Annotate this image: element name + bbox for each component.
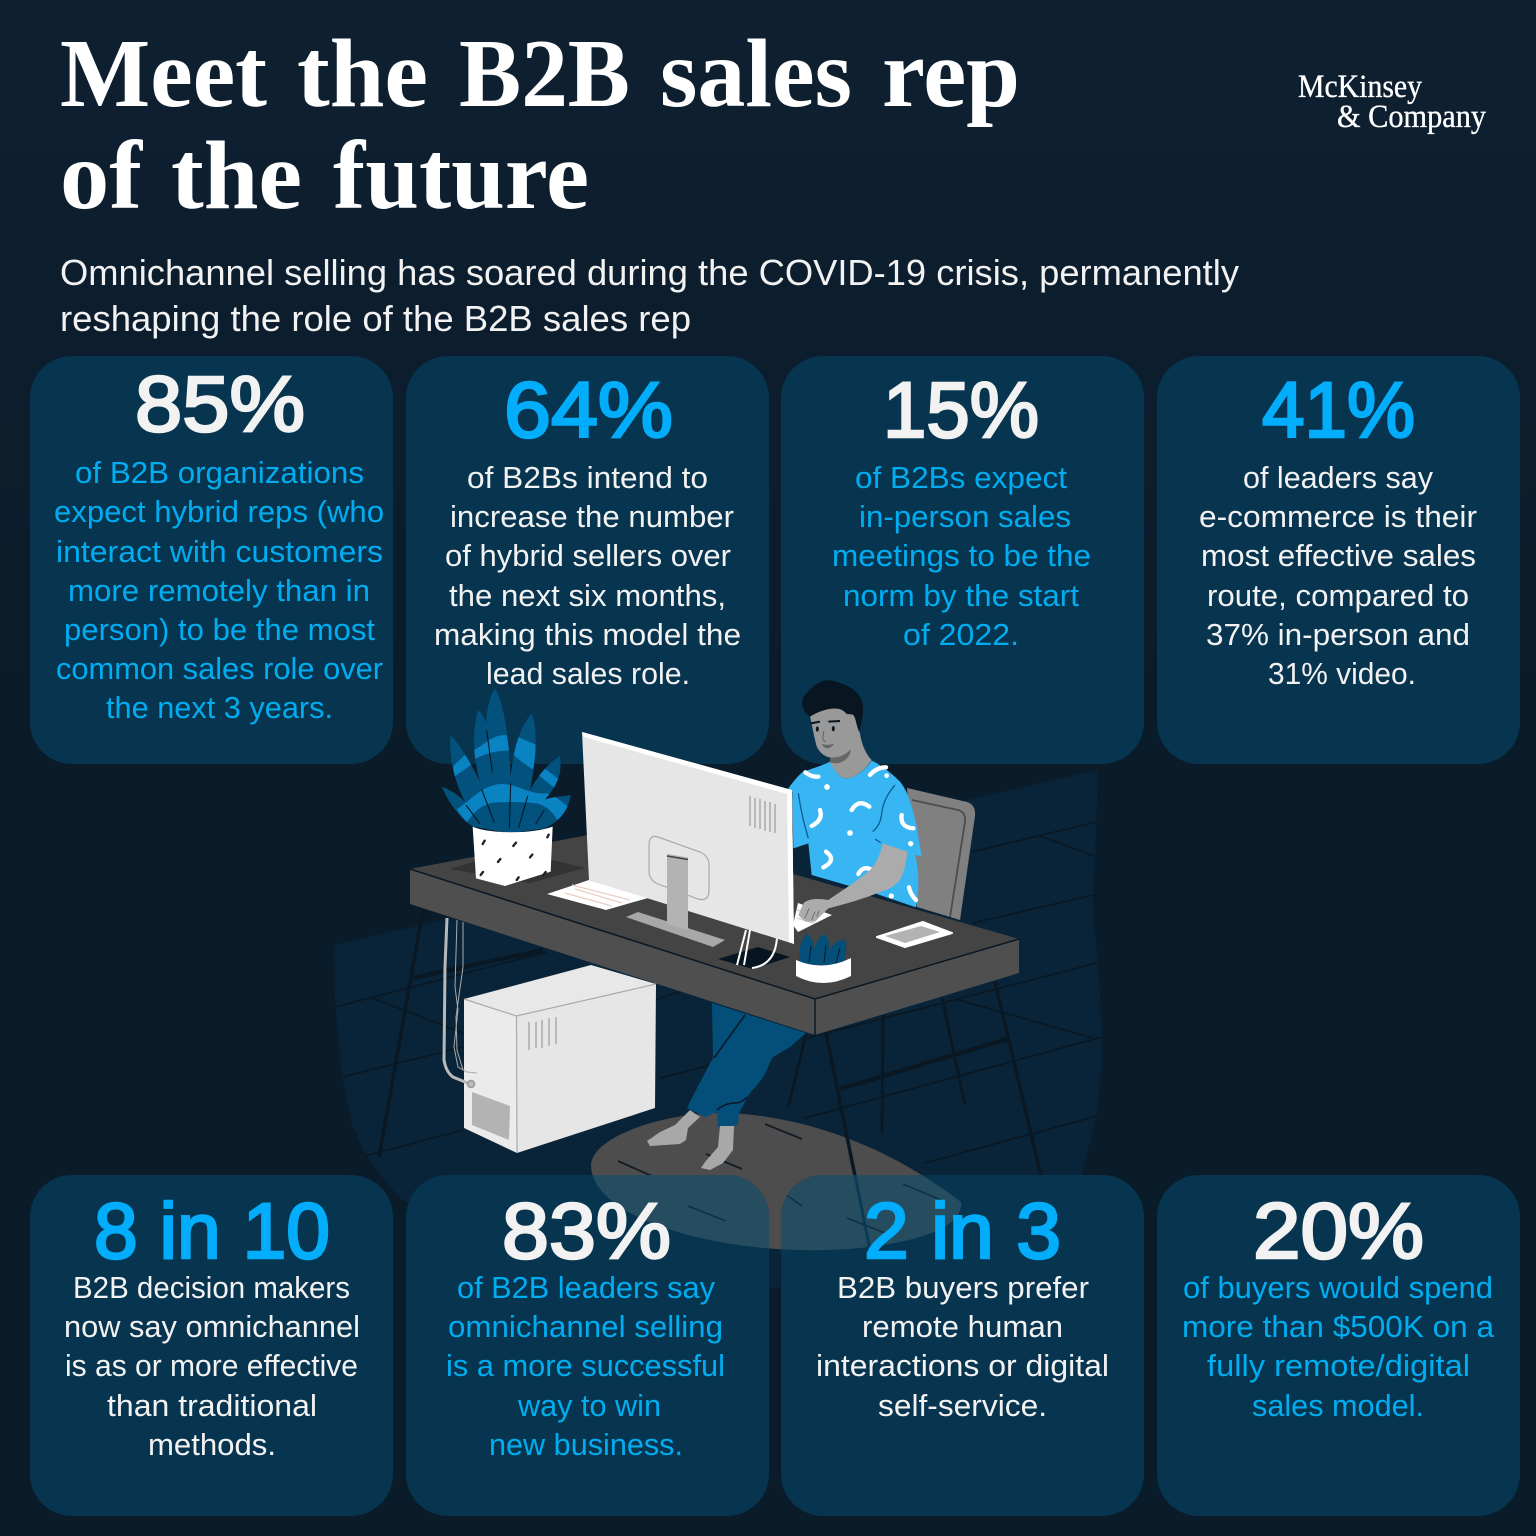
panel: 41% e-commerce: e-commerce is their — [1199, 499, 1477, 534]
panel: 20% remote spend: 20% — [1253, 1186, 1424, 1275]
logo: McKinsey & Company: & Company — [1337, 99, 1486, 135]
panel: 2 in 3 buyers: B2B buyers prefer — [837, 1270, 1089, 1305]
panel: 20% remote spend — [1157, 1175, 1520, 1516]
rug — [591, 1113, 961, 1250]
panel: 41% e-commerce: route, compared to — [1207, 578, 1469, 613]
floor lines — [335, 822, 1102, 1163]
monitor — [582, 732, 794, 947]
panel: 2 in 3 buyers: interactions or digital — [816, 1348, 1109, 1383]
subtitle: Omnichannel selling has soared during the COVID-19 crisis, permanently — [60, 252, 1239, 293]
panel: 85% hybrid reps: 85% — [135, 359, 305, 448]
panel: 20% remote spend: more than $500K on a — [1182, 1309, 1495, 1344]
panel: 83% leaders — [406, 1175, 769, 1516]
title — [60, 20, 1020, 230]
chair — [907, 788, 975, 920]
panel: 2 in 3 buyers: remote human — [862, 1309, 1063, 1344]
panel: 41% e-commerce: most effective sales — [1201, 538, 1476, 573]
title: Meet — [60, 20, 267, 128]
subtitle — [60, 252, 1239, 339]
panel: 85% hybrid reps — [30, 356, 393, 764]
tablet — [877, 922, 952, 947]
title: the — [171, 122, 302, 230]
panel: 20% remote spend: of buyers would spend — [1183, 1270, 1493, 1305]
panel: 83% leaders: way to win — [517, 1388, 661, 1423]
panel: 15% in-person norm: of B2Bs expect — [855, 460, 1067, 495]
panel: 64% increase hybrid sellers: of hybrid sellers over — [445, 538, 731, 573]
panel: 85% hybrid reps: interact with customers — [56, 534, 383, 569]
panel: 85% hybrid reps: of B2B organizations — [75, 455, 364, 490]
cable hole — [718, 947, 790, 969]
panel: 85% hybrid reps: expect hybrid reps (who — [54, 494, 384, 529]
panel: 8 in 10 omnichannel: B2B decision makers — [73, 1270, 350, 1305]
title: B2B — [459, 20, 630, 128]
cables — [444, 918, 477, 1088]
panel: 64% increase hybrid sellers: of B2Bs intend to — [467, 460, 708, 495]
panel: 83% leaders: new business. — [489, 1427, 683, 1462]
panel: 85% hybrid reps: person) to be the most — [64, 612, 375, 647]
rug marks — [618, 1124, 802, 1177]
logo: McKinsey & Company: McKinsey — [1298, 69, 1422, 105]
panel: 15% in-person norm: meetings to be the — [832, 538, 1091, 573]
logo: McKinsey & Company — [1298, 69, 1486, 135]
panel: 2 in 3 buyers: 2 in 3 — [864, 1186, 1061, 1275]
panel: 83% leaders: omnichannel selling — [448, 1309, 723, 1344]
panel: 8 in 10 omnichannel: now say omnichannel — [64, 1309, 360, 1344]
panel: 85% hybrid reps: the next 3 years. — [106, 690, 333, 725]
panel: 64% increase hybrid sellers: making this model the — [434, 617, 741, 652]
panel: 64% increase hybrid sellers: lead sales role. — [486, 656, 690, 691]
panel: 64% increase hybrid sellers: 64% — [504, 365, 673, 454]
face and neck — [810, 708, 872, 778]
hair — [802, 680, 863, 732]
person: torso, head and hair — [788, 680, 922, 907]
panel: 85% hybrid reps: more remotely than in — [68, 573, 370, 608]
panel: 41% e-commerce: 31% video. — [1268, 656, 1416, 691]
shirt — [788, 761, 922, 907]
computer tower — [464, 965, 656, 1153]
panel: 41% e-commerce: of leaders say — [1243, 460, 1433, 495]
panel: 41% e-commerce: 41% — [1262, 365, 1415, 454]
panel: 15% in-person norm: of 2022. — [903, 617, 1019, 652]
arm and hand — [798, 843, 907, 922]
panel: 15% in-person norm: 15% — [883, 365, 1039, 454]
title: future — [333, 122, 589, 230]
panel: 20% remote spend: fully remote/digital — [1207, 1348, 1470, 1383]
plant — [442, 688, 570, 832]
plant pot shadow — [450, 860, 585, 883]
keyboard — [793, 903, 832, 932]
plant pot — [473, 827, 553, 886]
panel: 15% in-person norm — [781, 356, 1144, 764]
desk front legs — [379, 910, 1042, 1250]
subtitle: reshaping the role of the B2B sales rep — [60, 298, 691, 339]
panel: 8 in 10 omnichannel: 8 in 10 — [94, 1186, 330, 1275]
panel: 64% increase hybrid sellers: the next six months, — [449, 578, 726, 613]
room backdrop — [334, 770, 1102, 1288]
panel: 8 in 10 omnichannel — [30, 1175, 393, 1516]
title: sales — [660, 20, 852, 128]
panel: 2 in 3 buyers: self-service. — [878, 1388, 1047, 1423]
panel: 64% increase hybrid sellers — [406, 356, 769, 764]
facial features — [811, 721, 840, 748]
title: the — [297, 20, 428, 128]
illustration: rep working at desk — [334, 680, 1102, 1288]
title: rep — [882, 20, 1020, 128]
panel: 83% leaders: 83% — [502, 1186, 671, 1275]
panel: 64% increase hybrid sellers: increase the number — [450, 499, 734, 534]
monitor cables — [737, 930, 777, 968]
small desk plant — [796, 934, 851, 983]
panel: 8 in 10 omnichannel: is as or more effective — [65, 1348, 358, 1383]
trousers — [687, 1003, 806, 1127]
panel: 20% remote spend: sales model. — [1252, 1388, 1424, 1423]
paper — [547, 880, 648, 910]
panel: 8 in 10 omnichannel: methods. — [148, 1427, 276, 1462]
desk back legs — [788, 998, 965, 1133]
panel: 41% e-commerce — [1157, 356, 1520, 764]
feet — [647, 1110, 700, 1146]
panel: 41% e-commerce: 37% in-person and — [1206, 617, 1470, 652]
title: of — [60, 122, 143, 230]
shirt pattern — [805, 767, 916, 900]
panel: 83% leaders: is a more successful — [446, 1348, 725, 1383]
panel: 15% in-person norm: in-person sales — [859, 499, 1071, 534]
panel: 15% in-person norm: norm by the start — [843, 578, 1079, 613]
panel: 2 in 3 buyers — [781, 1175, 1144, 1516]
desk — [410, 827, 1019, 1035]
panel: 8 in 10 omnichannel: than traditional — [107, 1388, 317, 1423]
panel: 85% hybrid reps: common sales role over — [56, 651, 383, 686]
panel: 83% leaders: of B2B leaders say — [457, 1270, 715, 1305]
